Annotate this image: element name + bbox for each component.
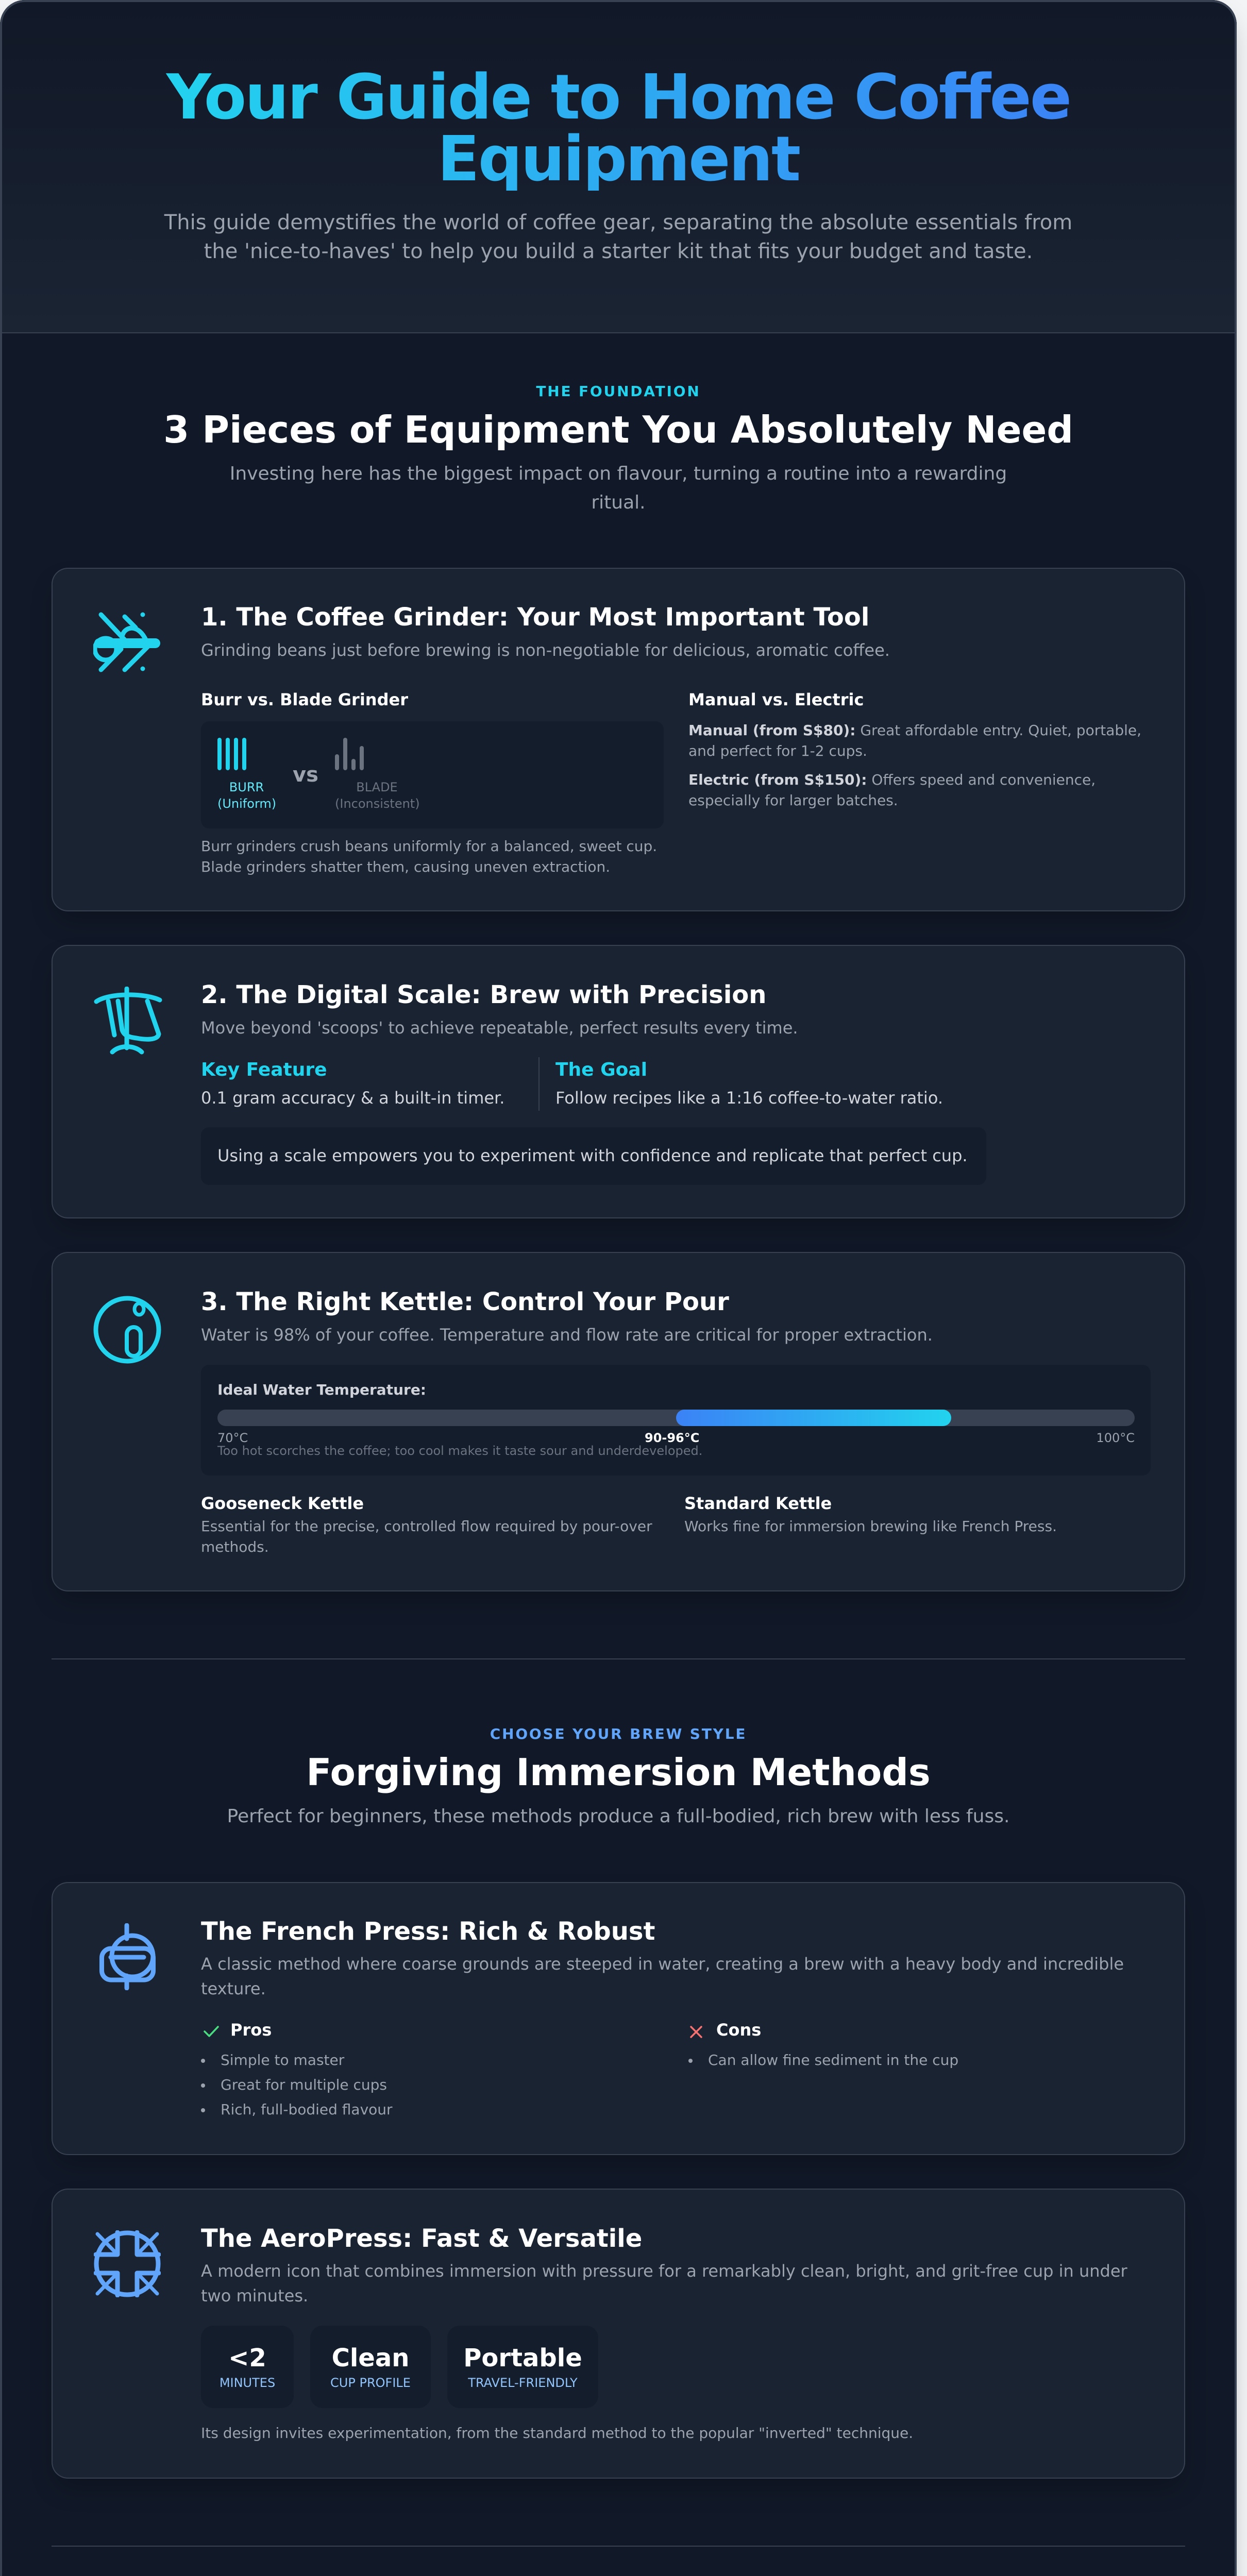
ideal temperature label: 90-96°C: [645, 1431, 699, 1445]
intro text: This guide demystifies the world of coffee gear, separating the absolute essentials from: [164, 211, 1072, 234]
title: [165, 67, 1072, 191]
electric description: Electric (from S$150): Offers speed and convenience,: [688, 771, 1096, 788]
callout text: Using a scale empowers you to experiment with confidence and replicate that perfect cup.: [217, 1146, 968, 1165]
panel: kettle: [52, 1252, 1185, 1591]
scale heading: 2. The Digital Scale: Brew with Precision: [201, 980, 766, 1009]
goal text: Follow recipes like a 1:16 coffee-to-water ratio.: [555, 1088, 943, 1108]
blade label: [335, 780, 420, 811]
panel: aeropress: [52, 2189, 1185, 2479]
pros list: [201, 2052, 393, 2118]
stat caption: MINUTES: [220, 2376, 275, 2390]
aeropress description: A modern icon that combines immersion with pressure for a remarkably clean, bright, and grit-free cup in under: [201, 2261, 1127, 2281]
panel: french press: [52, 1882, 1185, 2155]
burr bars: [217, 738, 246, 770]
kettle heading: 3. The Right Kettle: Control Your Pour: [201, 1287, 729, 1316]
header panel: [0, 0, 1237, 333]
icon: aeropress: [94, 2230, 161, 2297]
title: Equipment: [437, 124, 799, 195]
burr label: (Uniform): [217, 796, 276, 811]
gooseneck text: methods.: [201, 1538, 269, 1555]
burr vs blade note: Burr grinders crush beans uniformly for a balanced, sweet cup.: [201, 838, 657, 855]
standard kettle text: Works fine for immersion brewing like French Press.: [684, 1518, 1057, 1535]
french press description: texture.: [201, 1979, 266, 1998]
temperature track: [217, 1410, 1135, 1426]
max temperature label: 100°C: [1096, 1431, 1135, 1445]
burr vs blade note: [201, 838, 657, 875]
scale callout: [201, 1127, 986, 1185]
section intro: foundation: ritual.: [591, 492, 646, 513]
intro text: [164, 211, 1072, 263]
pros list: Great for multiple cups: [221, 2076, 387, 2093]
french press heading: The French Press: Rich & Robust: [201, 1917, 655, 1946]
versus label: vs: [293, 763, 318, 787]
pros heading: Pros: [230, 2020, 272, 2040]
pros list: Simple to master: [221, 2052, 344, 2069]
temperature chart: [201, 1365, 1151, 1476]
icon: grinder: [93, 612, 160, 672]
gooseneck text: [201, 1518, 652, 1555]
electric description: [688, 771, 1096, 809]
grinder heading: 1. The Coffee Grinder: Your Most Important Tool: [201, 603, 869, 632]
temperature chart title: Ideal Water Temperature:: [217, 1381, 426, 1398]
min temperature label: 70°C: [217, 1431, 248, 1445]
goal heading: The Goal: [555, 1059, 647, 1080]
stat value: <2: [228, 2344, 266, 2372]
panel: coffee grinder: [52, 568, 1185, 911]
section heading: immersion: Forgiving Immersion Methods: [306, 1751, 931, 1794]
electric description: especially for larger batches.: [688, 792, 898, 809]
french press description: [201, 1954, 1124, 1998]
section intro: foundation: [230, 463, 1007, 513]
stat: minutes: [201, 2326, 294, 2408]
grinder subtitle: Grinding beans just before brewing is non-negotiable for delicious, aromatic coffee.: [201, 640, 890, 660]
aeropress note: Its design invites experimentation, from the standard method to the popular "inverted" technique.: [201, 2425, 913, 2442]
section label: brew style: CHOOSE YOUR BREW STYLE: [490, 1725, 747, 1742]
cons heading: Cons: [716, 2020, 761, 2040]
icon: cross: [690, 2026, 702, 2038]
burr label: [217, 780, 276, 811]
title: Your Guide to Home Coffee: [166, 62, 1070, 133]
stat value: Portable: [463, 2344, 582, 2372]
blade bars: [335, 738, 364, 770]
aeropress description: [201, 2259, 1127, 2308]
blade label: (Inconsistent): [335, 796, 420, 811]
cons list: Can allow fine sediment in the cup: [708, 2052, 958, 2069]
pros list: Rich, full-bodied flavour: [221, 2101, 393, 2118]
manual description: Manual (from S$80): Great affordable entry. Quiet, portable,: [688, 722, 1141, 739]
manual vs electric heading: Manual vs. Electric: [688, 690, 864, 709]
gooseneck text: Essential for the precise, controlled flow required by pour-over: [201, 1518, 652, 1535]
burr vs blade note: Blade grinders shatter them, causing uneven extraction.: [201, 858, 610, 875]
standard kettle heading: Standard Kettle: [684, 1494, 832, 1513]
blade label: BLADE: [356, 780, 398, 794]
section label: the foundation: THE FOUNDATION: [536, 383, 701, 400]
ideal range fill: [676, 1410, 951, 1426]
intro text: the 'nice-to-haves' to help you build a starter kit that fits your budget and taste.: [204, 240, 1033, 263]
gooseneck heading: Gooseneck Kettle: [201, 1494, 364, 1513]
icon: kettle: [94, 1296, 161, 1363]
burr label: BURR: [229, 780, 264, 794]
section intro: foundation: Investing here has the biggest impact on flavour, turning a routine into a rewarding: [230, 463, 1007, 484]
cons list: [688, 2050, 1018, 2071]
section heading: foundation: 3 Pieces of Equipment You Absolutely Need: [163, 408, 1073, 451]
stat caption: CUP PROFILE: [330, 2376, 411, 2390]
key feature heading: Key Feature: [201, 1059, 327, 1080]
icon: scale: [94, 987, 162, 1054]
section intro: immersion: Perfect for beginners, these methods produce a full-bodied, rich brew with less fuss.: [227, 1806, 1009, 1827]
burr vs blade heading: Burr vs. Blade Grinder: [201, 690, 408, 709]
manual description: [688, 722, 1141, 759]
burr vs blade comparison chart: [201, 721, 664, 828]
panel: digital scale: [52, 945, 1185, 1218]
aeropress heading: The AeroPress: Fast & Versatile: [201, 2224, 642, 2253]
key feature text: 0.1 gram accuracy & a built-in timer.: [201, 1088, 504, 1108]
temperature note: Too hot scorches the coffee; too cool makes it taste sour and underdeveloped.: [217, 1444, 702, 1458]
kettle subtitle: Water is 98% of your coffee. Temperature and flow rate are critical for proper extraction.: [201, 1325, 933, 1345]
stat: cup profile: [310, 2326, 431, 2408]
stat caption: TRAVEL-FRIENDLY: [468, 2376, 578, 2390]
aeropress description: two minutes.: [201, 2286, 308, 2306]
icon: check: [204, 2026, 219, 2037]
scale subtitle: Move beyond 'scoops' to achieve repeatable, perfect results every time.: [201, 1018, 798, 1038]
french press description: A classic method where coarse grounds are steeped in water, creating a brew with a heavy body and incredible: [201, 1954, 1124, 1974]
icon: french press: [99, 1923, 156, 1990]
manual description: and perfect for 1-2 cups.: [688, 742, 867, 759]
stat: portable: [447, 2326, 598, 2408]
stat value: Clean: [332, 2344, 409, 2372]
